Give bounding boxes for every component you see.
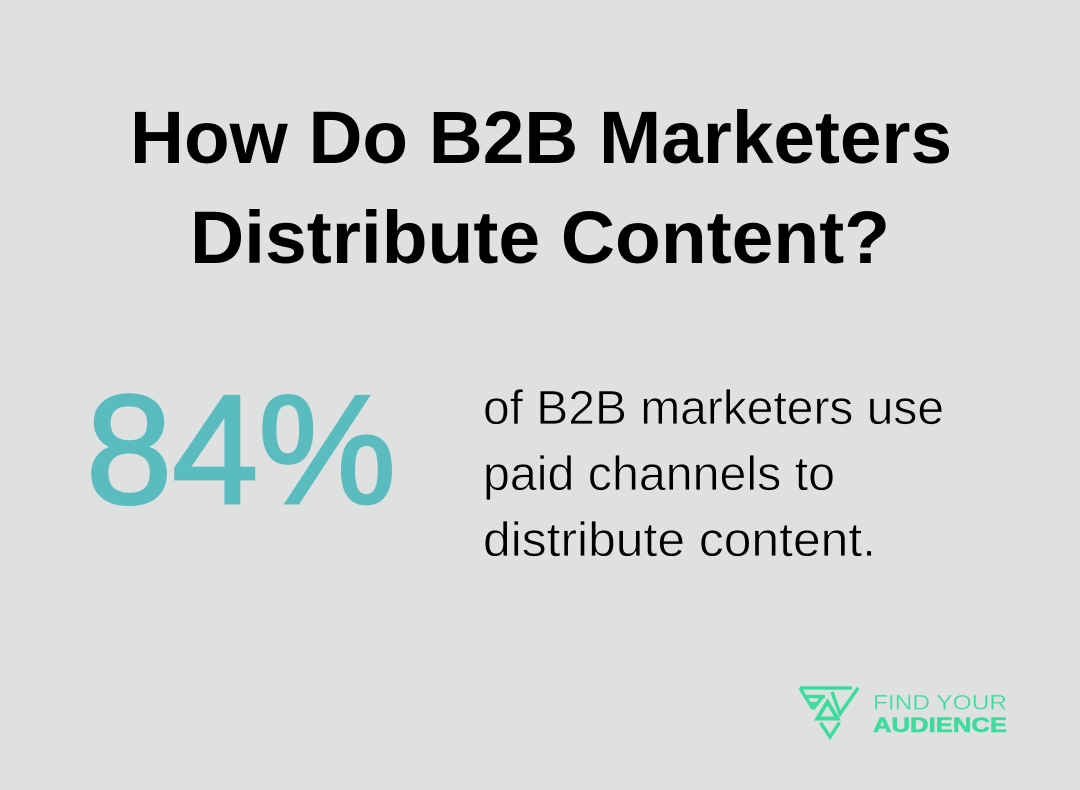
big statistic: 84%: 84%	[86, 363, 396, 536]
title: How Do B2B Marketers	[130, 96, 952, 179]
title	[130, 96, 952, 279]
logo wordmark: FIND YOUR: FIND YOUR	[873, 692, 1007, 714]
icon: triangle logo mark	[800, 688, 858, 737]
description text: paid channels to	[483, 448, 835, 501]
title: Distribute Content?	[190, 196, 890, 279]
logo wordmark: AUDIENCE: AUDIENCE	[873, 714, 1007, 737]
description text: of B2B marketers use	[483, 382, 944, 435]
description text	[483, 382, 944, 567]
description text: distribute content.	[483, 514, 876, 567]
logo: Find Your Audience	[800, 688, 1007, 737]
